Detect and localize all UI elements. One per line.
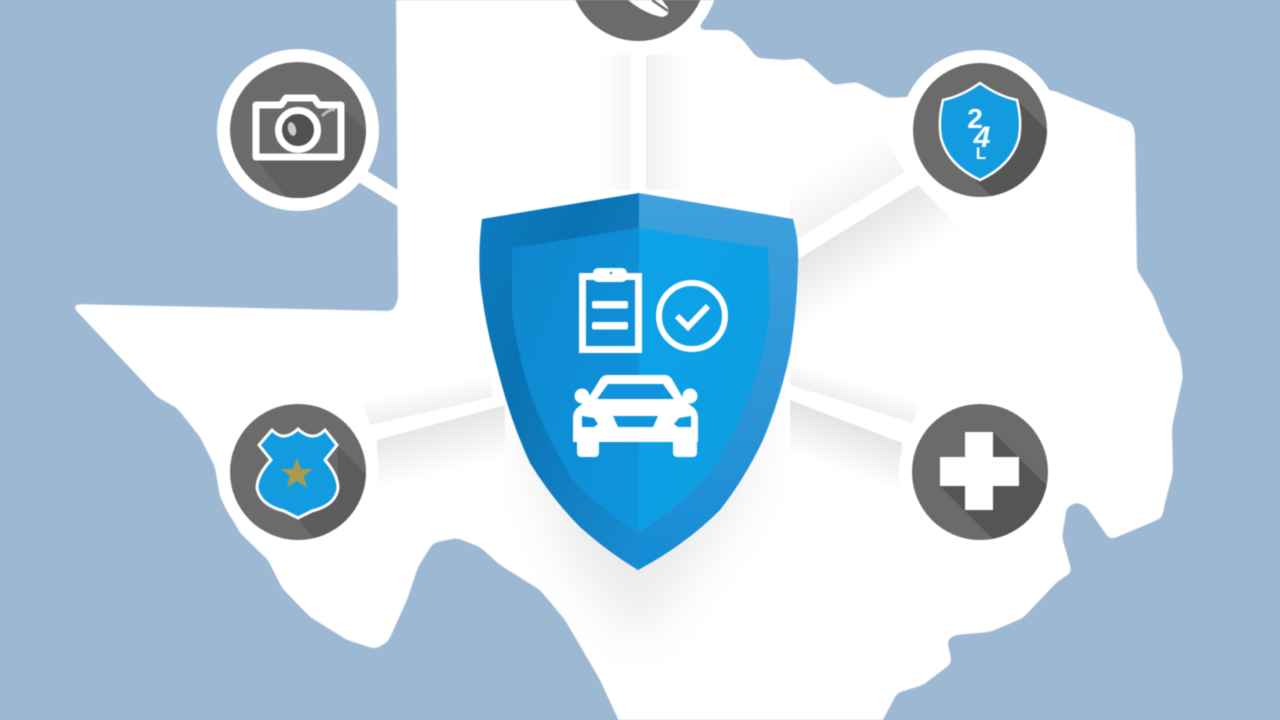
icon: 24-hour shield: L [976,144,986,163]
shield: outer right half [638,193,798,570]
icon: 24-hour shield: 2 [967,103,983,134]
icon: medical cross [900,403,1049,541]
connector: camera to shield [362,176,482,250]
icon: 24-hour shield [907,50,1050,198]
icon: police badge [222,403,378,541]
shield: inner right panel [639,228,770,532]
shield: outer left half [479,193,639,570]
shield: inner left panel [512,228,639,532]
icon: phone (cropped at top) [557,0,719,54]
connector shadows [366,55,945,623]
icon: camera [216,48,380,212]
icon: check mark in circle [659,283,725,349]
icon: clipboard [582,268,638,350]
icon: 24-hour shield: 4 [973,121,991,154]
icon: car front [573,375,698,457]
central shield [479,193,798,570]
